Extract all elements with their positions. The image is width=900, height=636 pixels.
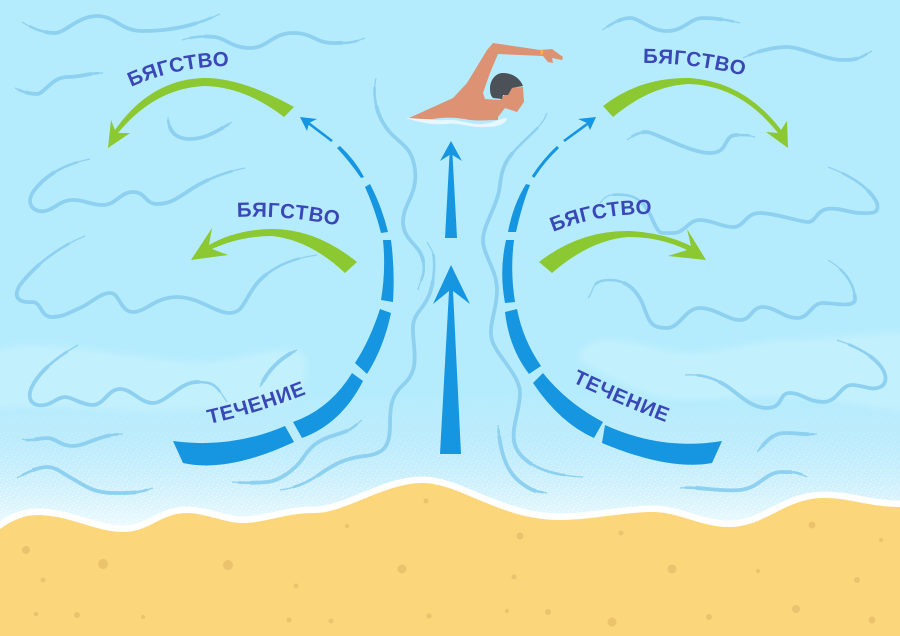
icon: swimmer bbox=[406, 43, 563, 127]
label: escape middle right: БЯГСТВО bbox=[549, 200, 651, 232]
light water patch left bbox=[0, 345, 306, 412]
label: escape top left: БЯГСТВО bbox=[127, 52, 228, 86]
left rip current arc bbox=[173, 117, 394, 465]
water ripple lines bbox=[15, 14, 886, 493]
arrow: escape top left bbox=[108, 78, 294, 148]
label: escape middle left: БЯГСТВО bbox=[238, 202, 339, 224]
arrow: escape middle left bbox=[191, 228, 357, 273]
label: escape top right: БЯГСТВО bbox=[644, 48, 745, 74]
sand bbox=[0, 483, 900, 636]
foam dots bbox=[0, 415, 899, 526]
right rip current arc bbox=[502, 117, 722, 465]
label: current left: ТЕЧЕНИЕ bbox=[206, 381, 306, 423]
arrow: escape middle right bbox=[539, 229, 706, 273]
sand grains bbox=[22, 498, 883, 626]
hair bbox=[490, 73, 523, 99]
arrow: upper centre current bbox=[440, 141, 462, 238]
light water patch right bbox=[580, 333, 900, 412]
arrow: escape top right bbox=[603, 78, 788, 148]
label: current right: ТЕЧЕНИЕ bbox=[576, 369, 670, 422]
wristband bbox=[540, 50, 543, 54]
water background bbox=[0, 334, 900, 526]
arrow: lower centre current bbox=[433, 265, 470, 454]
foam line bbox=[0, 483, 900, 532]
water foam around swimmer bbox=[406, 118, 507, 127]
beach bbox=[0, 483, 900, 636]
shallow water gradient bbox=[0, 395, 900, 535]
body and arm bbox=[409, 43, 563, 120]
